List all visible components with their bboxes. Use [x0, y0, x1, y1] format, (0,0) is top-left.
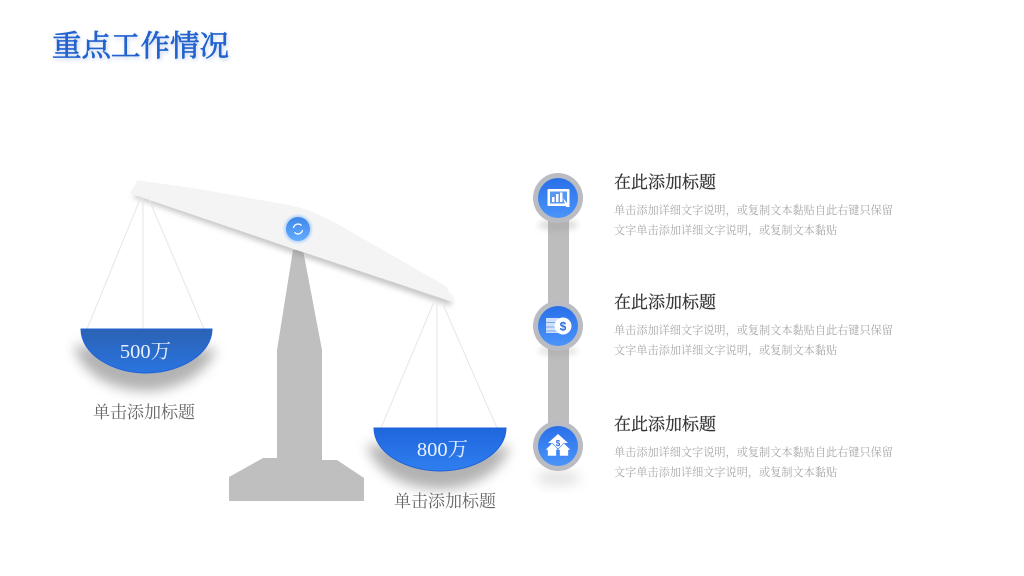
text block 2: 在此添加标题 — [614, 293, 716, 312]
title: 重点工作情况 — [52, 30, 229, 63]
pan value: 500万 — [120, 341, 171, 363]
text block 1 — [614, 173, 893, 237]
text block 2: 文字单击添加详细文字说明，或复制文本黏贴 — [614, 343, 837, 357]
beam — [131, 181, 452, 301]
right pan group — [367, 302, 510, 489]
left pan label: 单击添加标题 — [93, 403, 195, 422]
icon: refresh — [294, 224, 302, 234]
pan — [81, 329, 212, 373]
node 1 — [533, 173, 583, 231]
node 3 — [533, 421, 583, 485]
scale illustration — [74, 181, 510, 511]
text block 1: 在此添加标题 — [614, 173, 716, 192]
stand — [229, 250, 364, 501]
pan value: 800万 — [417, 439, 468, 461]
text block 2: 单击添加详细文字说明，或复制文本黏贴自此右键只保留 — [614, 323, 893, 337]
icon: chart screen — [548, 189, 570, 207]
strings — [381, 302, 497, 428]
text block 1: 文字单击添加详细文字说明，或复制文本黏贴 — [614, 223, 837, 237]
timeline — [533, 173, 583, 485]
left pan group — [74, 197, 216, 391]
pan — [374, 428, 506, 471]
text block 3 — [614, 415, 893, 479]
text block 3: 文字单击添加详细文字说明，或复制文本黏贴 — [614, 465, 837, 479]
strings — [87, 197, 204, 329]
pan shadow — [74, 345, 216, 391]
text block 2 — [614, 293, 893, 357]
pivot hub — [284, 215, 312, 243]
icon: houses: $ — [556, 439, 561, 448]
text block 3: 单击添加详细文字说明，或复制文本黏贴自此右键只保留 — [614, 445, 893, 459]
beam shadow — [133, 190, 451, 306]
pan shadow — [367, 444, 510, 489]
right pan label: 单击添加标题 — [394, 492, 496, 511]
node 2 — [533, 301, 583, 356]
text block 1: 单击添加详细文字说明，或复制文本黏贴自此右键只保留 — [614, 203, 893, 217]
icon: money: $ — [560, 320, 567, 334]
connector bar — [548, 205, 569, 445]
text block 3: 在此添加标题 — [614, 415, 716, 434]
